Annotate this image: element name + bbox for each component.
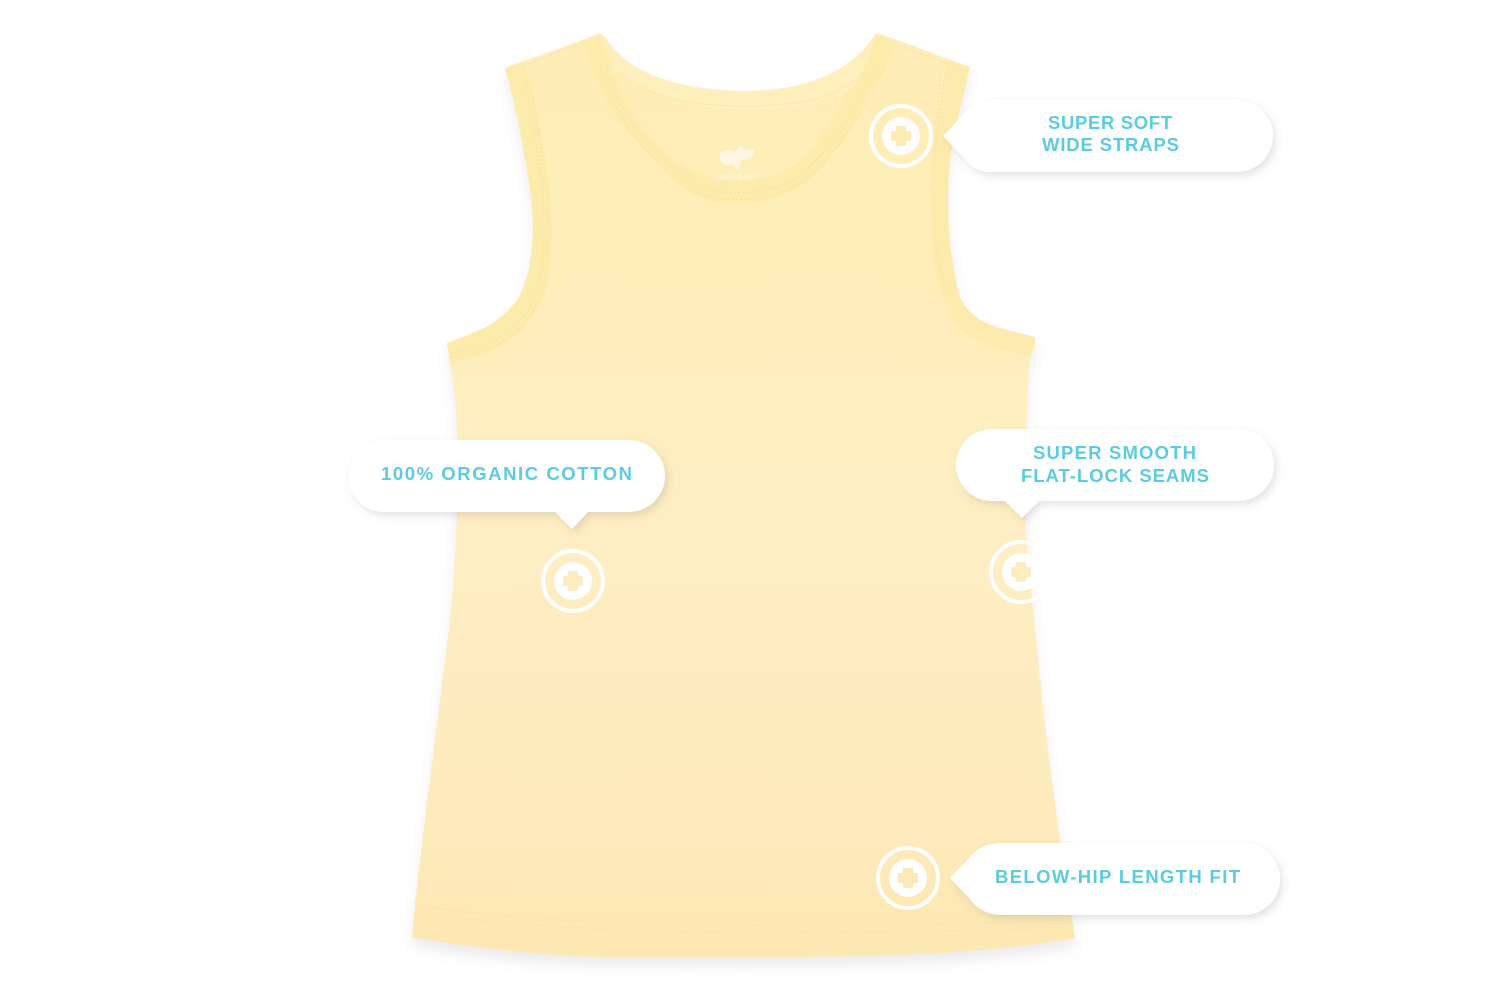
back neck inner band: [606, 35, 876, 110]
tank top garment: [412, 33, 1075, 958]
callout bubble: [956, 429, 1274, 518]
callout: below-hip length: [950, 843, 1280, 915]
callout text: SUPER SOFT: [1048, 112, 1173, 133]
brand label: Lucky & Me™: [716, 172, 762, 181]
neck collar front band: [582, 35, 897, 204]
callout text: SUPER SMOOTH: [1033, 442, 1196, 463]
callout text: 100% ORGANIC COTTON: [381, 463, 632, 484]
icon: plus marker straps: [871, 106, 931, 166]
left armhole band: [447, 61, 552, 362]
callout bubble: [348, 440, 665, 529]
callout: flat-lock seams: [956, 429, 1274, 518]
callout: flat-lock seams: FLAT-LOCK SEAMS: [1021, 465, 1209, 486]
shoulder and hem stitching: [421, 43, 1065, 932]
icon: plus marker hem: [878, 848, 938, 908]
callout: super soft wide straps: WIDE STRAPS: [1042, 134, 1179, 155]
callout bubble: [943, 100, 1273, 172]
logo on chest: [716, 144, 762, 181]
icon: plus marker seams: [991, 542, 1051, 602]
callout bubble: [950, 843, 1280, 915]
right armhole band: [930, 60, 1035, 357]
icon: fish: [719, 144, 755, 170]
callout: organic cotton: [348, 440, 665, 529]
shirt body: [412, 33, 1075, 958]
callout: super soft wide straps: [943, 100, 1273, 172]
callout text: BELOW-HIP LENGTH FIT: [995, 866, 1241, 887]
icon: plus marker cotton: [543, 551, 603, 611]
